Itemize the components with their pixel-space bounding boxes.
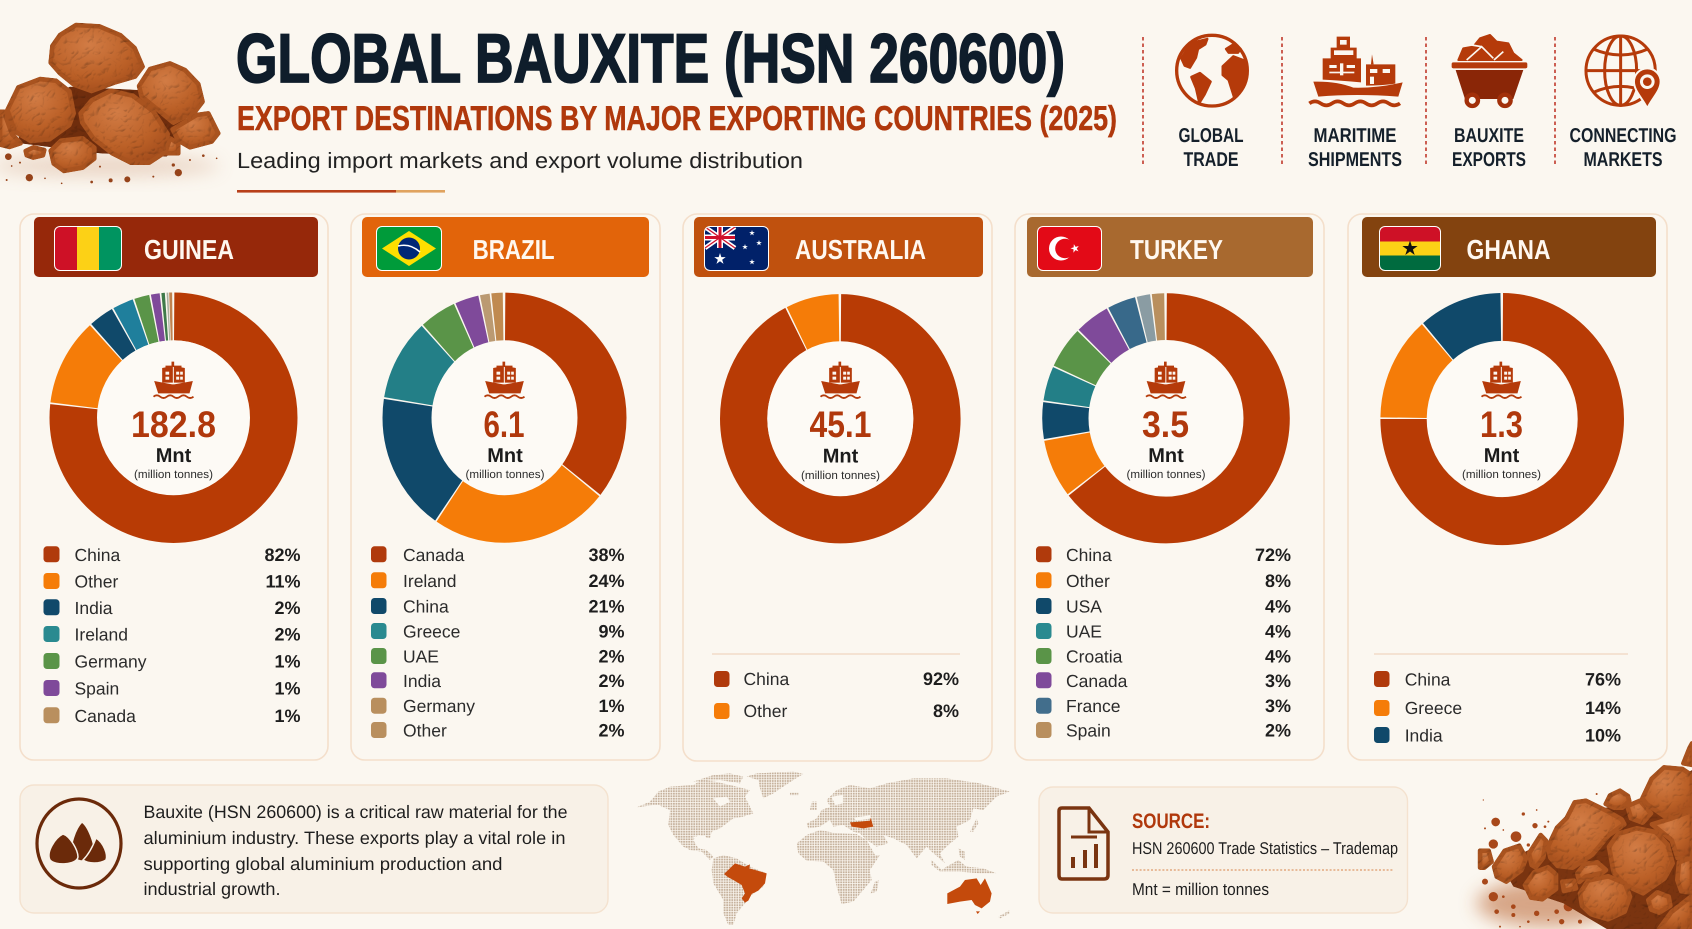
legend: Brazil: 2% [598, 671, 624, 691]
legend: Turkey: 3% [1265, 671, 1291, 691]
label: bauxite exports: EXPORTS [1452, 149, 1526, 171]
label: maritime shipments: SHIPMENTS [1308, 149, 1402, 171]
legend: Turkey: 2% [1265, 720, 1291, 740]
legend: Brazil: Ireland [403, 571, 457, 591]
panel: Ghana [1348, 214, 1667, 760]
legend: Brazil [371, 545, 624, 740]
legend: Turkey: Croatia [1066, 646, 1123, 666]
icon: connecting markets [1586, 36, 1661, 108]
legend: Brazil: 21% [588, 596, 624, 616]
legend: Ghana: India [1405, 726, 1443, 746]
label: connecting markets [1570, 125, 1676, 171]
header: Guinea: GUINEA [144, 234, 234, 265]
icon: global trade [1177, 35, 1247, 106]
legend: Turkey: China [1066, 545, 1112, 565]
flag: Ghana [1379, 226, 1441, 271]
icon: maritime shipments [1309, 37, 1403, 105]
image: bauxite rock pile bottom-right [1477, 743, 1692, 929]
legend: Guinea [44, 545, 300, 726]
legend: Turkey: USA [1066, 596, 1102, 616]
subtitle: EXPORT DESTINATIONS BY MAJOR EXPORTING COUNTRIES (2025) [237, 100, 1117, 138]
header: Ghana [1362, 217, 1656, 277]
legend: Brazil: UAE [403, 646, 439, 666]
legend: Brazil: 1% [598, 696, 624, 716]
legend: Guinea: Canada [74, 706, 136, 726]
tagline: Leading import markets and export volume distribution [237, 148, 803, 173]
text: bauxite note [144, 802, 568, 899]
panel: Australia [683, 214, 992, 761]
icon: document chart [1059, 808, 1108, 879]
donut chart: Australia [744, 319, 937, 519]
donut chart: Brazil: 6.1 [484, 404, 524, 445]
legend: Australia: China [744, 669, 789, 689]
donut chart: Brazil: (million tonnes) [466, 469, 545, 481]
donut chart: Ghana: Mnt [1484, 445, 1520, 467]
legend: Brazil: Germany [403, 696, 475, 716]
donut chart: Australia: (million tonnes) [801, 470, 880, 482]
legend: Ghana: 76% [1585, 670, 1621, 690]
donut chart: Turkey: 3.5 [1142, 404, 1189, 445]
legend: Brazil: 9% [598, 622, 624, 642]
label: global trade [1178, 125, 1244, 171]
legend: Turkey: France [1066, 696, 1120, 716]
highlight: Australia [947, 878, 992, 914]
legend: Brazil: 24% [588, 571, 624, 591]
legend: Guinea: 11% [265, 572, 300, 592]
panel: Turkey [1015, 214, 1324, 760]
dotted world map [637, 772, 1010, 925]
legend: Ghana: 14% [1585, 698, 1621, 718]
legend: Guinea: 1% [274, 706, 300, 726]
donut chart: Turkey: Mnt [1148, 445, 1184, 467]
text: bauxite note: supporting global aluminium production and [144, 854, 502, 874]
text: bauxite note: aluminium industry. These exports play a vital role in [144, 828, 566, 848]
legend: Guinea: Ireland [74, 624, 128, 644]
legend: Guinea: 2% [274, 598, 300, 618]
legend: Turkey: UAE [1066, 622, 1102, 642]
legend: Guinea: 2% [274, 624, 300, 644]
donut chart: Guinea: 182.8 [131, 404, 216, 445]
legend: Guinea: China [74, 545, 120, 565]
legend: Brazil: Canada [403, 545, 465, 565]
donut chart: Ghana [1404, 317, 1601, 521]
donut chart: Guinea: Mnt [156, 445, 192, 467]
header icon strip [1143, 35, 1676, 171]
highlight: Brazil [724, 863, 767, 903]
legend: Guinea: 1% [274, 652, 300, 672]
legend: Guinea: Spain [74, 678, 119, 698]
panel: Brazil [351, 214, 660, 760]
legend: Guinea: 1% [274, 678, 300, 698]
legend: Ghana [1374, 654, 1628, 746]
panel: bauxite note [20, 785, 608, 913]
legend: Brazil: 2% [598, 720, 624, 740]
legend: Guinea: 82% [264, 545, 300, 565]
legend: Brazil: 38% [588, 545, 624, 565]
panel: Guinea [20, 214, 328, 760]
flag: Turkey [1037, 226, 1102, 271]
icon: ship [154, 362, 193, 398]
legend: Australia: Other [744, 701, 787, 721]
text: bauxite note: Bauxite (HSN 260600) is a critical raw material for the [144, 802, 568, 822]
flag: Australia [704, 226, 769, 271]
legend: Ghana: 10% [1585, 726, 1621, 746]
donut chart: Turkey: (million tonnes) [1126, 469, 1206, 481]
panel: source [1039, 787, 1408, 913]
icon: ship [1146, 362, 1186, 398]
legend: Turkey: 4% [1265, 596, 1291, 616]
legend: Turkey: 72% [1255, 545, 1291, 565]
text: source heading: SOURCE: [1132, 810, 1210, 833]
icon: ship [485, 362, 524, 398]
legend: Turkey: Other [1066, 571, 1110, 591]
icon: bauxite exports [1452, 35, 1527, 106]
label: maritime shipments [1308, 125, 1402, 171]
legend: Turkey: Canada [1066, 671, 1128, 691]
legend: Turkey: 8% [1265, 571, 1291, 591]
header: Ghana: GHANA [1466, 234, 1551, 265]
label: global trade: GLOBAL [1178, 125, 1244, 147]
legend: Turkey: 4% [1265, 646, 1291, 666]
legend: Brazil: India [403, 671, 441, 691]
header: Guinea [34, 217, 318, 277]
legend: Turkey [1036, 545, 1291, 740]
header: Australia: AUSTRALIA [795, 234, 926, 265]
legend: Turkey: Spain [1066, 720, 1111, 740]
header: Brazil [362, 217, 649, 277]
donut chart: Ghana: (million tonnes) [1462, 469, 1541, 481]
header: Australia [694, 217, 983, 277]
flag: Brazil [376, 226, 442, 271]
legend: Brazil: Greece [403, 622, 460, 642]
legend: Brazil: 2% [598, 646, 624, 666]
icon: bauxite nuggets [37, 799, 121, 888]
legend: Turkey: 4% [1265, 622, 1291, 642]
donut chart: Australia: Mnt [823, 446, 859, 468]
legend: Brazil: Other [403, 720, 447, 740]
image: bauxite rock pile top-left [0, 25, 220, 184]
label: maritime shipments: MARITIME [1314, 125, 1396, 147]
donut chart: Turkey [1065, 317, 1267, 520]
title rule [237, 190, 445, 193]
legend: Ghana: Greece [1405, 698, 1462, 718]
legend: Australia: 92% [923, 669, 959, 689]
icon: ship [1482, 362, 1521, 398]
header: Turkey: TURKEY [1130, 234, 1223, 265]
donut chart: Guinea [73, 316, 274, 519]
legend: Turkey: 3% [1265, 696, 1291, 716]
label: bauxite exports: BAUXITE [1454, 125, 1524, 147]
text: bauxite note: industrial growth. [144, 879, 280, 899]
text: unit note: Mnt = million tonnes [1132, 880, 1269, 899]
title: GLOBAL BAUXITE (HSN 260600) [236, 20, 1065, 97]
flag: Guinea [54, 226, 122, 271]
donut chart: Guinea: (million tonnes) [134, 469, 213, 481]
label: bauxite exports [1452, 125, 1526, 171]
donut chart: Australia: 45.1 [810, 404, 872, 445]
donut chart: Ghana: 1.3 [1480, 404, 1523, 445]
legend: Ghana: China [1405, 670, 1451, 690]
label: connecting markets: MARKETS [1584, 149, 1662, 171]
legend: Guinea: Other [74, 572, 118, 592]
header: Turkey [1027, 217, 1313, 277]
legend: Australia [712, 654, 960, 721]
donut chart: Brazil: Mnt [487, 445, 523, 467]
icon: ship [821, 362, 860, 398]
text: source detail: HSN 260600 Trade Statistics – Trademap [1132, 839, 1398, 858]
legend: Brazil: China [403, 596, 449, 616]
legend: Guinea: Germany [74, 652, 147, 672]
legend: Guinea: India [74, 598, 113, 618]
donut chart: Brazil [407, 318, 602, 518]
legend: Australia: 8% [933, 701, 959, 721]
label: global trade: TRADE [1184, 149, 1238, 171]
header: Brazil: BRAZIL [473, 234, 555, 265]
highlight: Turkey [850, 818, 873, 828]
